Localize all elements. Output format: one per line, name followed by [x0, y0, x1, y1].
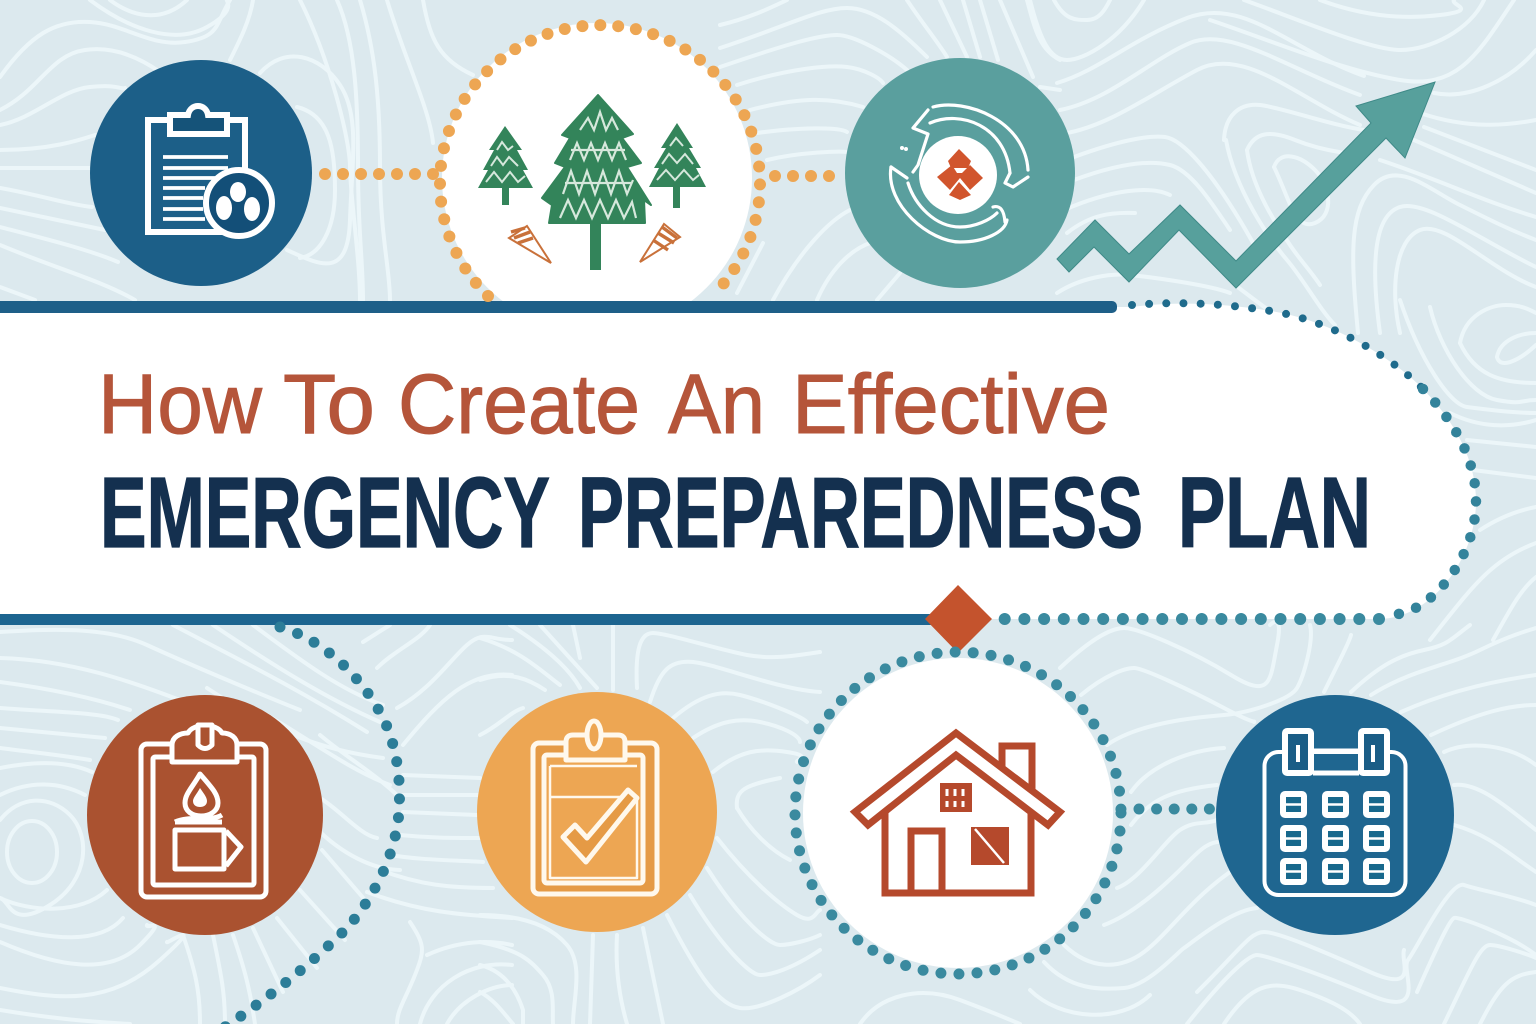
icon: large tree: [542, 95, 651, 270]
dotted ring: [795, 652, 1121, 974]
flame: [185, 774, 218, 816]
cycle arrow: upper: [930, 105, 1028, 173]
dotted path around band: [995, 303, 1476, 619]
icon: right tree: [649, 123, 706, 208]
box: [175, 822, 241, 869]
arrow head left: [913, 110, 928, 172]
icon: left peg: [509, 226, 551, 263]
panel: home circle: [795, 652, 1121, 974]
diamond marker: [925, 585, 992, 653]
title line two: EMERGENCY: [100, 457, 550, 569]
icon: clipboard with check mark: [477, 692, 717, 932]
icon: clipboard with people: [90, 60, 312, 286]
title line two: PLAN: [1178, 457, 1371, 569]
icon: left tree: [478, 126, 533, 205]
title line one: An: [668, 357, 765, 451]
title line two: PREPAREDNESS: [578, 457, 1143, 569]
panel: forest circle: [440, 23, 760, 333]
top rule: [0, 301, 1117, 313]
icon: right peg: [640, 224, 680, 262]
title line one: [98, 357, 1110, 451]
title band: [0, 301, 1476, 625]
arrow: rising zigzag trend: [1057, 82, 1435, 288]
bottom rule: [0, 614, 935, 625]
title: [98, 357, 1371, 569]
dotted connectors: top: [325, 174, 845, 176]
dotted ring: [440, 25, 760, 296]
arrow head right: [1005, 173, 1028, 187]
icon: calendar: [1216, 695, 1454, 935]
cycle arrow: lower: [890, 167, 1007, 242]
icon: clipboard with fire and supplies: [87, 695, 323, 935]
title line one: Effective: [792, 357, 1110, 451]
red diamond mark: [937, 149, 983, 200]
title line one: To: [283, 357, 375, 451]
icon: house: [855, 733, 1060, 893]
dotted connector: bottom right: [1139, 804, 1212, 814]
icon: recycling cycle with diamonds: [845, 58, 1075, 288]
title line one: Create: [398, 357, 640, 451]
title line two: [100, 457, 1371, 569]
title line one: How: [98, 357, 262, 451]
dotted connector: lower left: [225, 627, 399, 1024]
